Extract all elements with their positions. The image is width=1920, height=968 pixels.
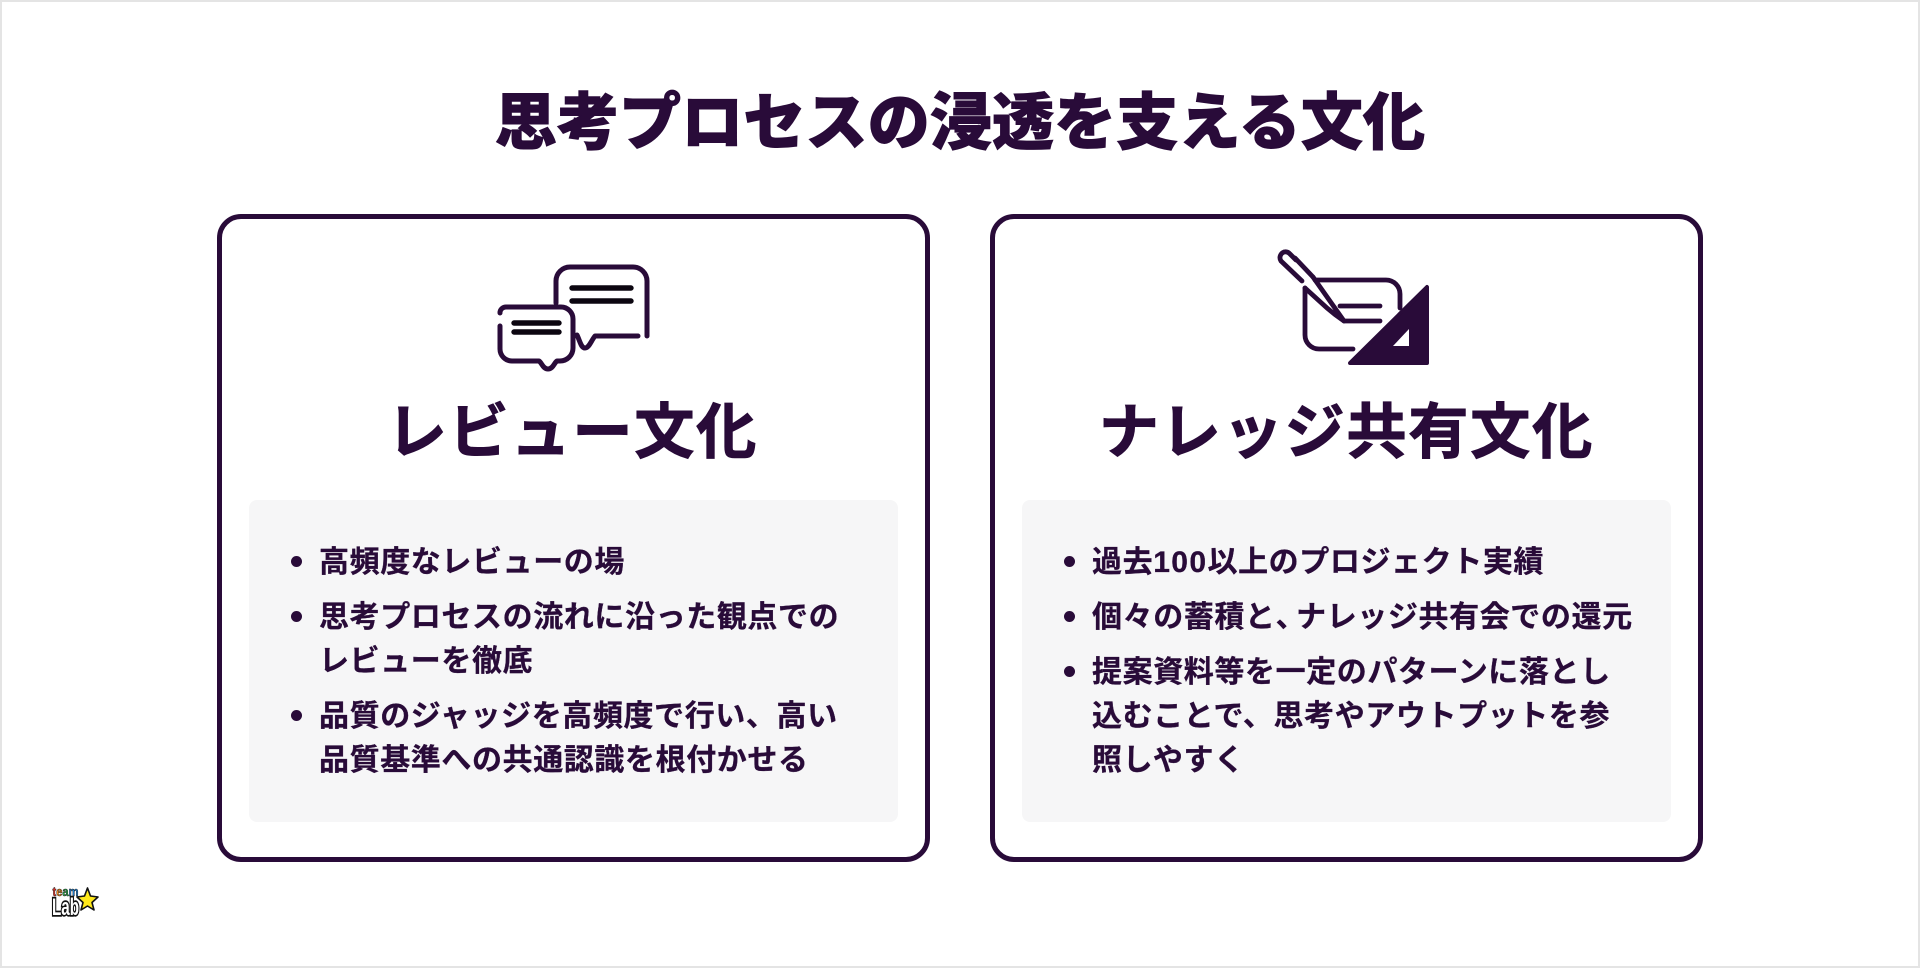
bullet marker: review 3 xyxy=(291,710,302,721)
heading: review culture: レビュー文化 xyxy=(387,399,758,466)
logo: teamLab: team xyxy=(52,884,78,899)
bullet text: review 2 xyxy=(319,600,839,678)
bullet marker: knowledge 1 xyxy=(1064,556,1075,567)
icon: pen, document and set square xyxy=(1278,249,1429,365)
bullet text: knowledge 3: 照しやすく xyxy=(1092,744,1245,777)
bullet text: knowledge 1: 過去100以上のプロジェクト実績 xyxy=(1092,546,1544,579)
heading: knowledge sharing culture: ナレッジ共有文化 xyxy=(1099,399,1594,466)
panel: review culture xyxy=(217,214,930,862)
logo: teamLab xyxy=(52,884,99,921)
bullet marker: knowledge 3 xyxy=(1064,666,1075,677)
icon: speech bubbles xyxy=(498,264,650,372)
bullet text: knowledge 3: 提案資料等を一定のパターンに落とし xyxy=(1092,656,1611,689)
bullet text: review 3: 品質のジャッジを高頻度で行い、高い xyxy=(319,700,838,733)
bullet text: review 2: 思考プロセスの流れに沿った観点での xyxy=(319,601,839,634)
bullet text: knowledge 2: 個々の蓄積と、ナレッジ共有会での還元 xyxy=(1092,601,1633,634)
bullet marker: review 1 xyxy=(291,556,302,567)
bullet marker: review 2 xyxy=(291,611,302,622)
title: 思考プロセスの浸透を支える文化 xyxy=(495,89,1425,158)
bullet marker: knowledge 2 xyxy=(1064,611,1075,622)
bullet text: review 3: 品質基準への共通認識を根付かせる xyxy=(319,744,809,777)
panel: review culture list xyxy=(249,500,898,822)
bullet text: knowledge 3 xyxy=(1092,656,1611,777)
panel: knowledge sharing list xyxy=(1022,500,1671,822)
panel: knowledge sharing culture xyxy=(990,214,1703,862)
bullet text: knowledge 3: 込むことで、思考やアウトプットを参 xyxy=(1092,700,1610,733)
bullet text: review 1: 高頻度なレビューの場 xyxy=(319,546,625,579)
bullet text: review 2: レビューを徹底 xyxy=(319,645,533,678)
bullet text: review 3 xyxy=(319,700,838,777)
logo: teamLab: Lab xyxy=(52,894,79,921)
